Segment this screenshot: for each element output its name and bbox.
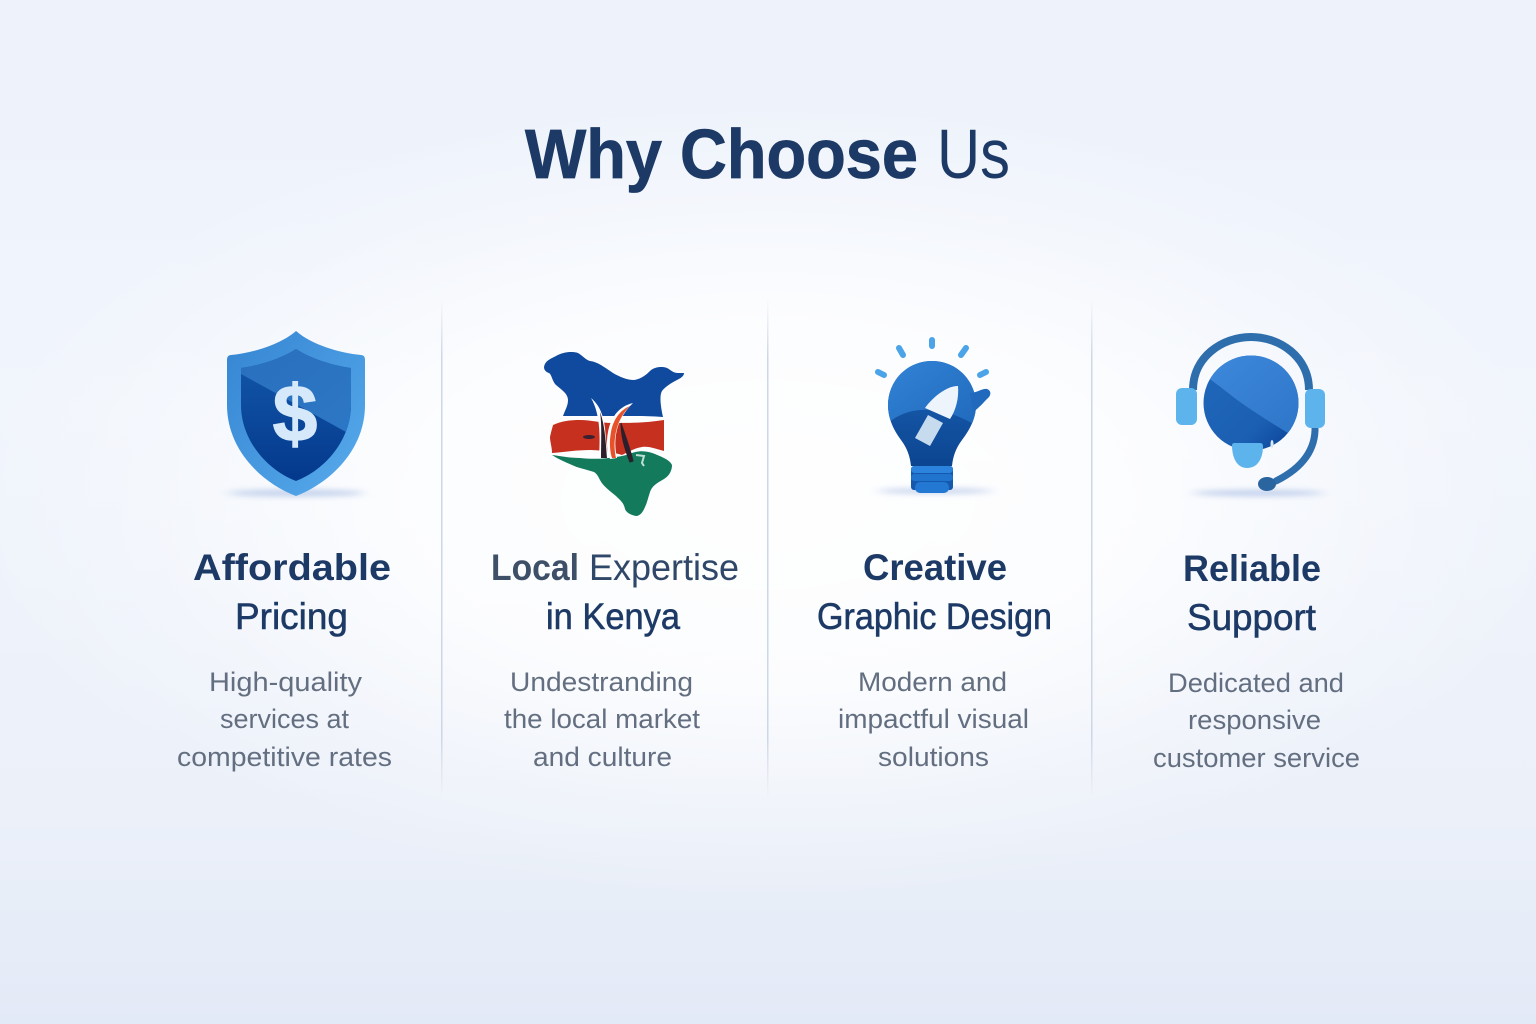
description: affordable pricing: services at	[220, 704, 349, 734]
heading: reliable support	[1183, 548, 1321, 638]
heading: local expertise: in Kenya	[546, 596, 680, 637]
panel: local expertise	[491, 352, 739, 772]
title: Us	[937, 115, 1010, 193]
icon: shield with dollar sign	[227, 331, 365, 496]
description: affordable pricing	[177, 667, 392, 772]
description: local expertise: and culture	[533, 742, 672, 772]
heading: local expertise: Local	[491, 547, 579, 588]
description: reliable support: customer service	[1153, 743, 1360, 773]
icon: shield with dollar sign: $	[273, 369, 317, 458]
heading: affordable pricing: Pricing	[235, 596, 348, 637]
heading: reliable support: Reliable	[1183, 548, 1321, 589]
heading: reliable support: Support	[1187, 597, 1317, 638]
panel: creative graphic design	[817, 340, 1052, 772]
heading: creative graphic design: Graphic Design	[817, 596, 1052, 637]
heading: local expertise	[491, 547, 739, 637]
description: affordable pricing: competitive rates	[177, 742, 392, 772]
heading: creative graphic design	[817, 547, 1052, 637]
description: creative graphic design: solutions	[878, 742, 989, 772]
heading: creative graphic design: Creative	[863, 547, 1007, 588]
description: creative graphic design: impactful visual	[838, 704, 1029, 734]
description: local expertise: Undestranding	[510, 667, 693, 697]
icon: light bulb with pen	[877, 340, 993, 494]
description: creative graphic design: Modern and	[858, 667, 1007, 697]
panel: affordable pricing	[177, 331, 392, 772]
description: local expertise: the local market	[504, 704, 701, 734]
description: creative graphic design	[838, 667, 1029, 772]
description: reliable support: Dedicated and	[1168, 668, 1344, 698]
heading: affordable pricing: Affordable	[193, 547, 391, 588]
description: reliable support	[1153, 668, 1360, 773]
icon: headset	[1176, 337, 1325, 496]
description: reliable support: responsive	[1188, 705, 1321, 735]
description: affordable pricing: High-quality	[209, 667, 363, 697]
icon: Kenya map flag	[544, 352, 684, 516]
panel: reliable support	[1153, 337, 1360, 773]
heading: affordable pricing	[193, 547, 391, 637]
title: Why Choose	[525, 115, 918, 193]
description: local expertise	[504, 667, 701, 772]
heading: local expertise: Expertise	[589, 547, 739, 588]
